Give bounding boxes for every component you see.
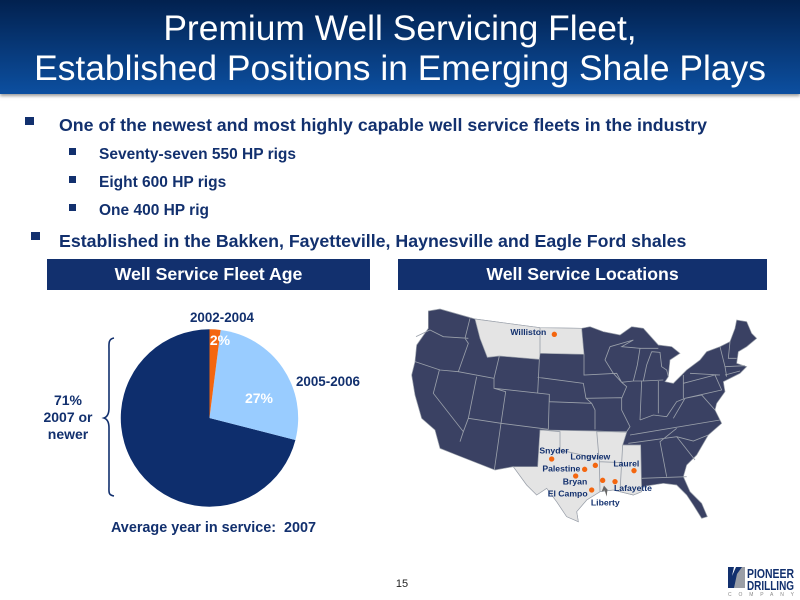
location: Snyder: [539, 446, 569, 462]
location: Palestine: Palestine: [542, 464, 581, 474]
page number: 15: [396, 578, 408, 590]
pie slice: 2%: [210, 329, 221, 418]
location: Liberty: Liberty: [591, 498, 620, 508]
sub bullet: 550 HP rigs: Seventy-seven 550 HP rigs: [99, 146, 296, 163]
sub bullet marker: [69, 148, 76, 155]
label: 71% 2007 or newer: 2007 or: [43, 409, 93, 425]
caption: average year: Average year in service: 2007: [111, 520, 316, 536]
brace: [104, 338, 114, 496]
map: state borders: [415, 318, 745, 478]
bullet: shale plays: Established in the Bakken, Fayetteville, Haynesville and Eagle Ford shales: [59, 231, 686, 251]
location: Longview: Longview: [570, 452, 611, 462]
label: 71% 2007 or newer: newer: [48, 426, 89, 442]
location: Lafayette: Lafayette: [614, 483, 652, 493]
sub bullet marker: [69, 176, 76, 183]
label: 2002-2004: 2002-2004: [190, 310, 255, 325]
label: 2005-2006: 2005-2006: [296, 374, 360, 389]
sub bullet marker: [69, 204, 76, 211]
title line 2: Established Positions in Emerging Shale Plays: [34, 48, 766, 88]
location: Laurel: Laurel: [613, 458, 639, 468]
sub bullet: 400 HP rig: One 400 HP rig: [99, 202, 209, 219]
location: Williston: Williston: [510, 327, 546, 337]
pie slice: 71%: [121, 329, 295, 507]
logo mark: [728, 567, 745, 588]
location: Snyder: Snyder: [539, 446, 569, 456]
panel heading: fleet age: [47, 259, 370, 290]
panel heading: fleet age: Well Service Fleet Age: [115, 264, 302, 284]
location: Lafayette: [612, 479, 652, 493]
title banner: [0, 0, 800, 94]
panel heading: locations: [398, 259, 767, 290]
bullet: newest fleets: One of the newest and most highly capable well service fleets in the industry: [59, 115, 707, 135]
pie slice: 27%: [210, 330, 298, 440]
location: El Campo: El Campo: [548, 489, 588, 499]
map: contiguous states: [412, 309, 757, 522]
map: highlighted state borders: [540, 328, 623, 492]
map: US well service locations: [411, 308, 758, 522]
bullet list: [25, 115, 707, 251]
location: Longview: [570, 452, 611, 468]
location: Liberty: [591, 478, 620, 508]
logo text: COMPANY: COMPANY: [728, 592, 795, 598]
label: 2%: 2%: [210, 332, 231, 348]
logo: Pioneer Drilling Company: [728, 566, 795, 598]
location: Laurel: [613, 458, 639, 473]
location: Bryan: Bryan: [563, 477, 587, 487]
panel heading: locations: Well Service Locations: [486, 264, 679, 284]
label: 71% 2007 or newer: 71%: [54, 392, 83, 408]
title line 1: Premium Well Servicing Fleet,: [163, 8, 637, 48]
label: 27%: 27%: [245, 390, 274, 406]
bullet marker: [25, 117, 34, 125]
map: highlighted southern states: [513, 430, 642, 522]
bullet marker: [31, 232, 40, 240]
sub bullet: 600 HP rigs: Eight 600 HP rigs: [99, 174, 226, 191]
map: highlighted northern states: [475, 319, 584, 359]
